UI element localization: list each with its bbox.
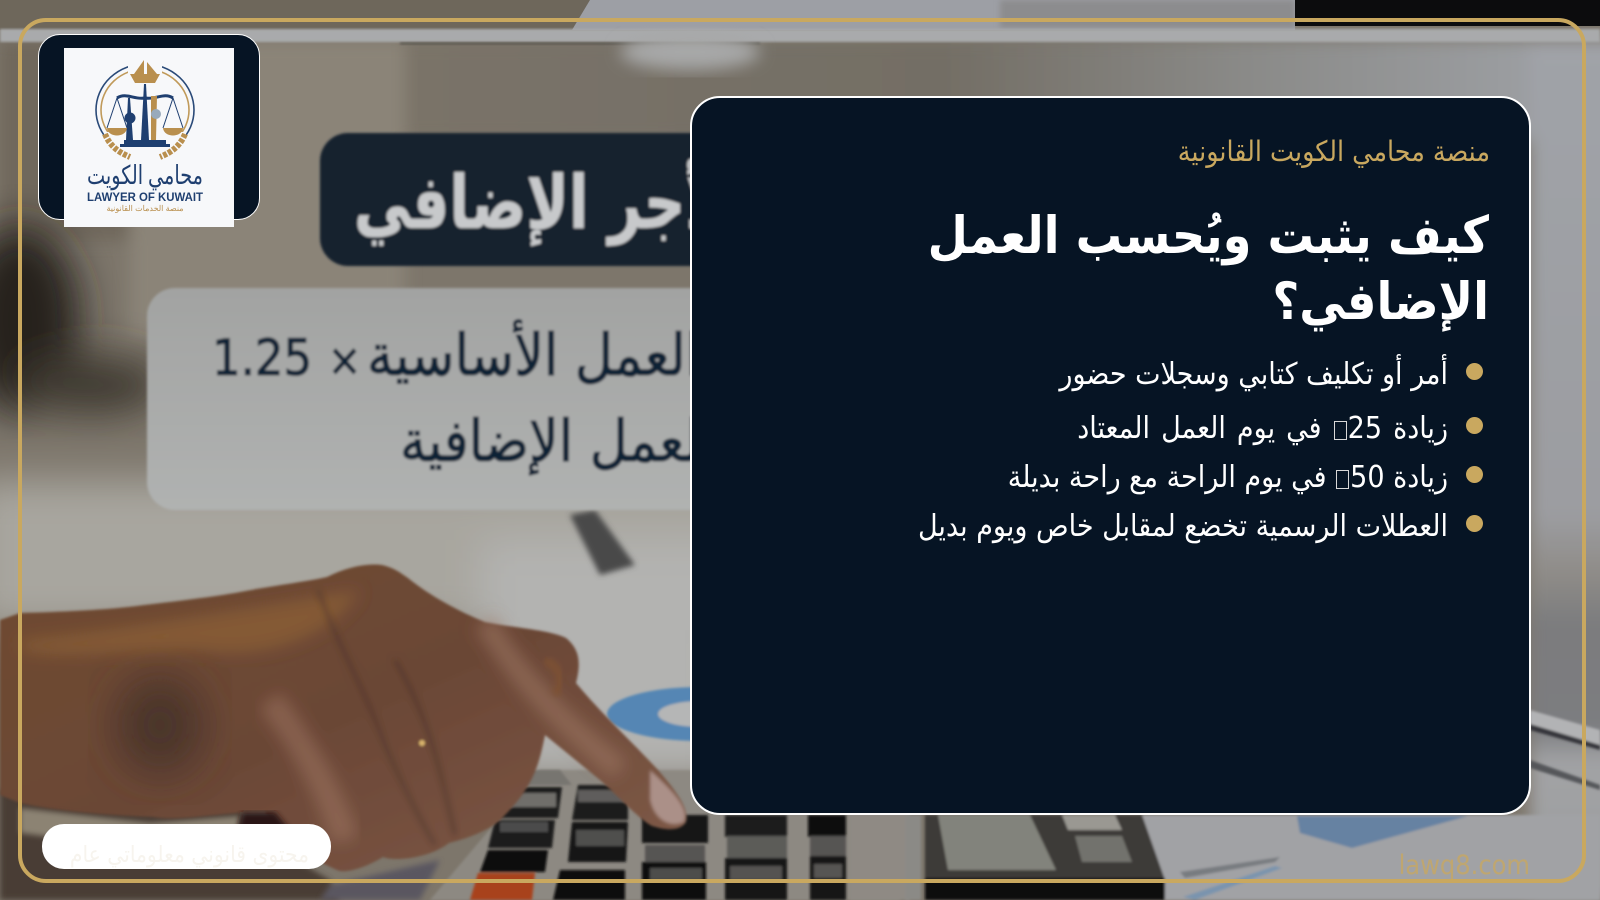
device and papers below panel: [850, 800, 910, 900]
formula card in photo: [147, 288, 887, 510]
formula card in photo: ساعة العمل الأساسية: [367, 319, 835, 389]
bullet dot: [1466, 363, 1483, 380]
overtime title pill in photo: الأجر الإضافي: [354, 158, 747, 247]
main panel: [690, 96, 1531, 815]
ship: [128, 62, 162, 82]
logo english name: LAWYER OF KUWAIT: [87, 190, 204, 204]
paper and chart left of panel: [570, 510, 635, 575]
logo: [64, 48, 234, 227]
website label: lawq8.com: [1399, 850, 1530, 881]
logo card: [38, 34, 260, 220]
scales and towers: [107, 84, 183, 147]
emblem rings: [96, 64, 194, 156]
bullet text: أمر أو تكليف كتابي وسجلات حضور: [1059, 357, 1448, 392]
heading: كيف يثبت ويُحسب العمل الإضافي؟: [928, 206, 1489, 332]
bullet dot: [1466, 417, 1483, 434]
bullet text: العطلات الرسمية تخضع لمقابل خاص ويوم بديل: [918, 509, 1448, 544]
eyebrow: platform name: منصة محامي الكويت القانونية: [1178, 135, 1490, 168]
bullet text: زيادة 25 في يوم العمل المعتاد: [1077, 411, 1448, 446]
right edge paper lines: [1530, 710, 1600, 790]
calculator keys: [470, 770, 846, 900]
calculator body: [430, 770, 900, 900]
logo tagline: منصة الخدمات القانونية: [106, 204, 184, 213]
hand: [0, 565, 687, 871]
wheat: [104, 132, 186, 158]
formula card in photo: ×: [328, 335, 361, 386]
overtime title pill in photo: [320, 133, 747, 266]
formula card in photo: 1.25: [212, 329, 312, 387]
bullet 2: [1077, 411, 1483, 446]
bullet text: زيادة 50 في يوم الراحة مع راحة بديلة: [1008, 460, 1448, 495]
bullet 1: [1058, 354, 1483, 392]
bullet dot: [1466, 515, 1483, 532]
bullet 4: [918, 509, 1483, 544]
bullet 3: [1008, 460, 1483, 495]
bottom-left note pill: [42, 824, 331, 869]
formula card in photo: ساعات العمل الإضافية: [400, 407, 887, 476]
top band: [0, 0, 590, 30]
note text: محتوى قانوني معلوماتي عام: [70, 842, 309, 868]
area under hand: [0, 790, 340, 900]
bullet dot: [1466, 466, 1483, 483]
